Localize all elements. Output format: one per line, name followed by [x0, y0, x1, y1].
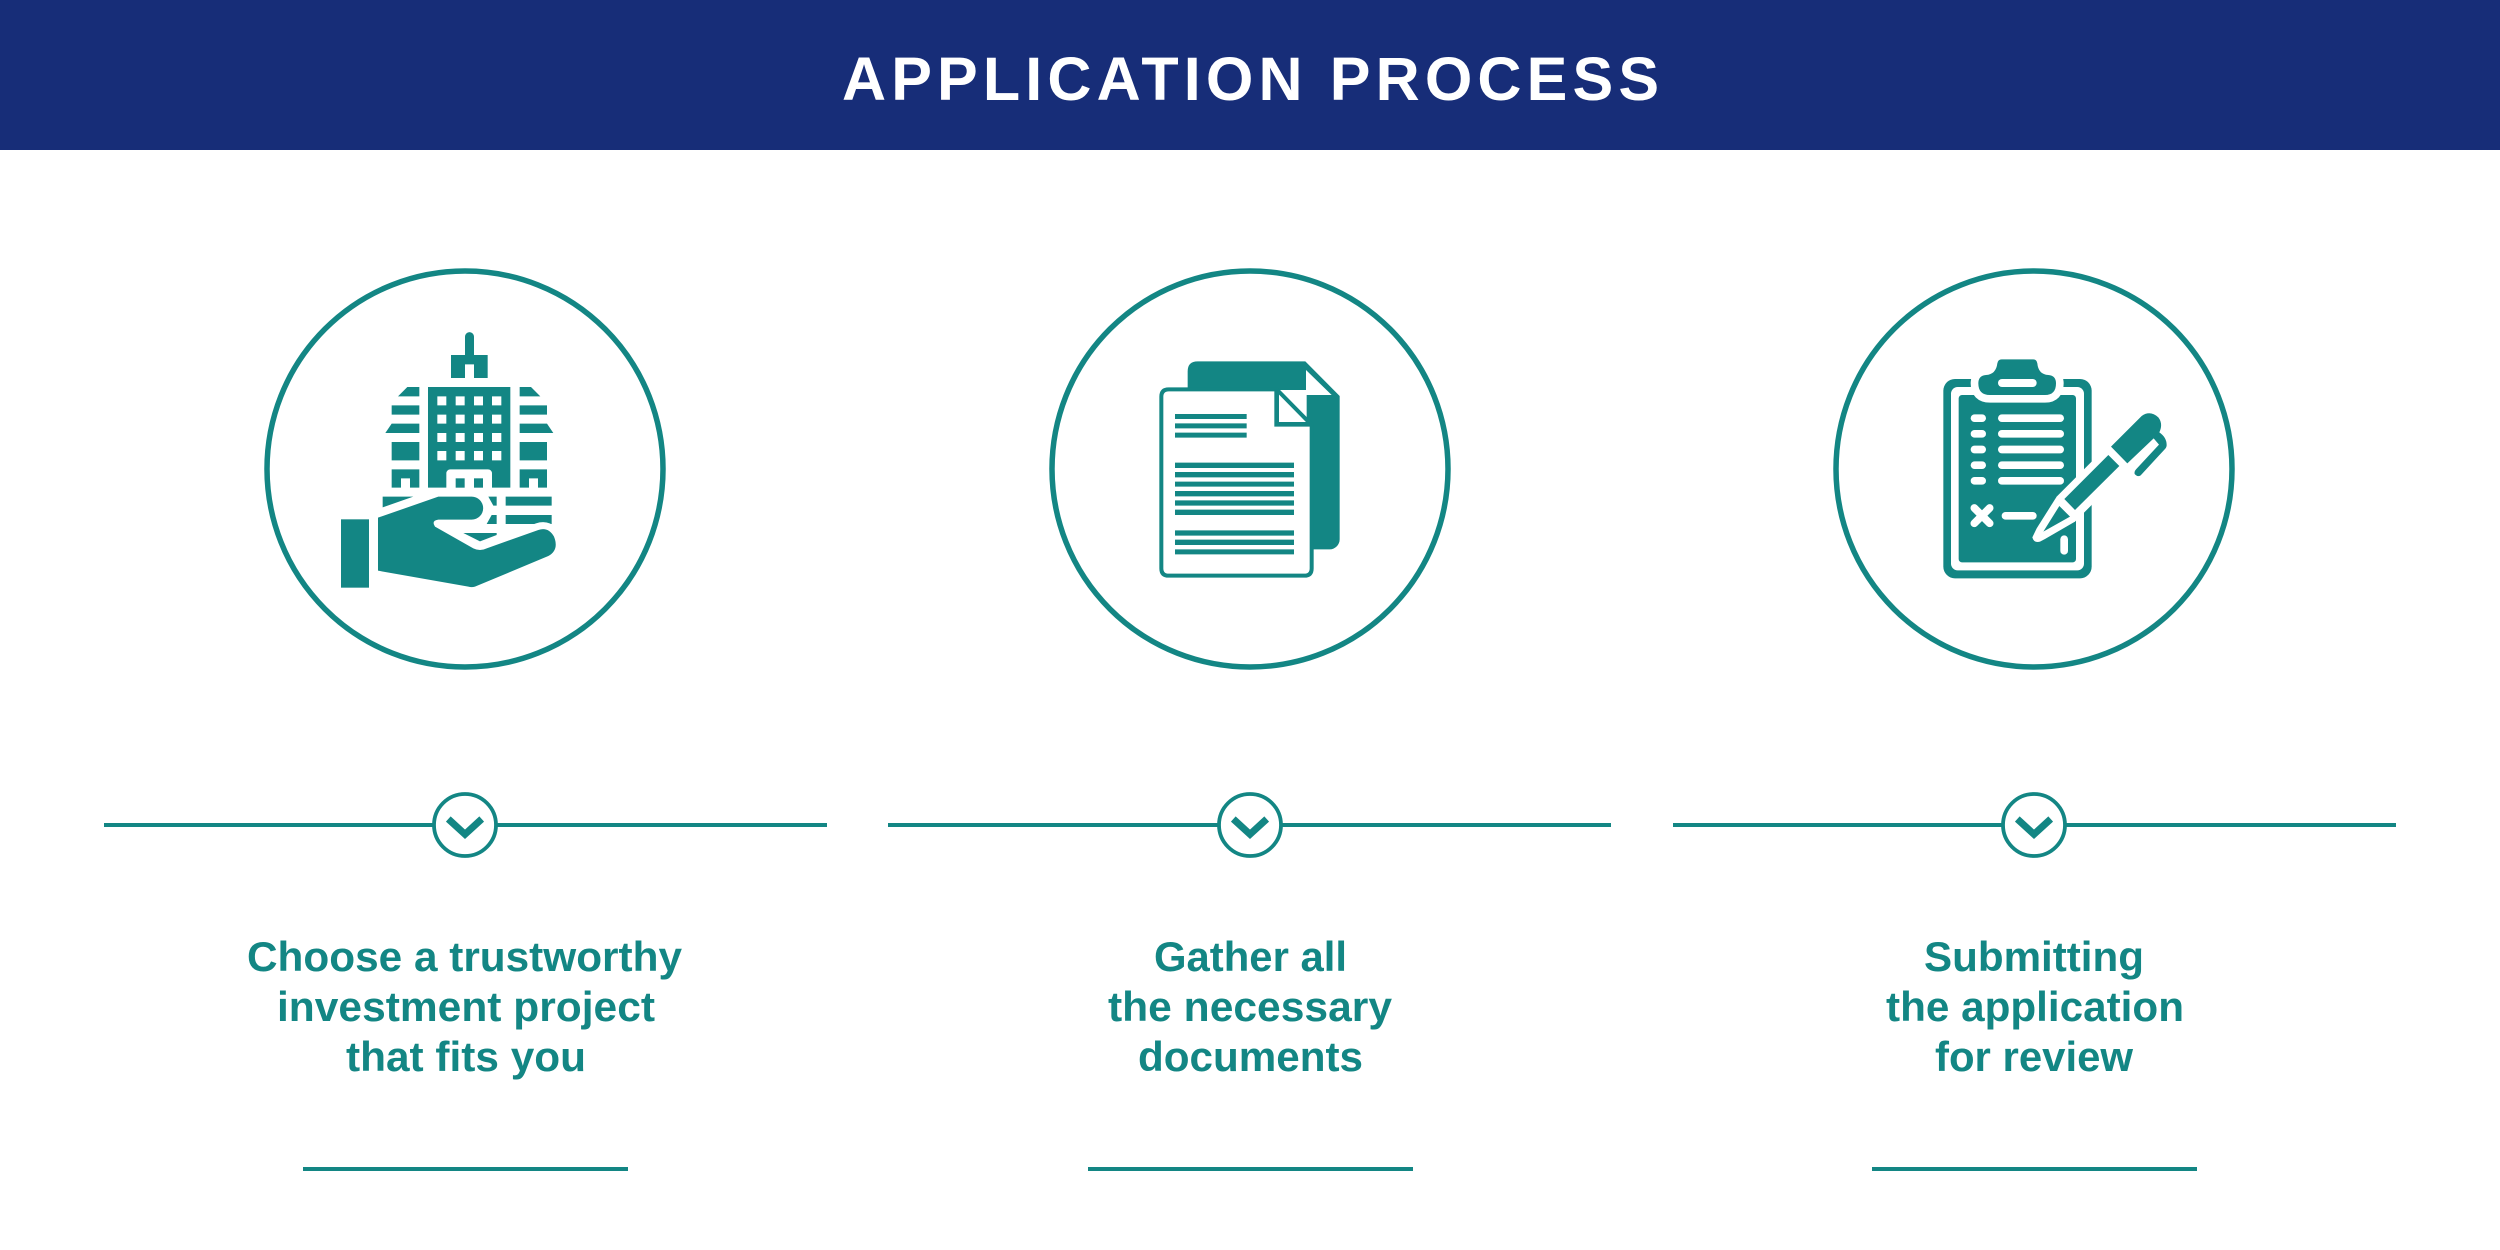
icon: building on hand — [341, 332, 556, 588]
divider with chevron badge: step 2 — [888, 794, 1611, 856]
divider with chevron badge: step 3 — [1673, 794, 2396, 856]
step 2 label — [1108, 933, 1393, 1080]
step 1 label: Choose a trustworthy — [247, 933, 683, 980]
panel: step 1 — [104, 271, 827, 1171]
bottom rule: step 3 — [1872, 1167, 2197, 1171]
step 3 label — [1886, 933, 2184, 1080]
step 2 label: the necessary — [1108, 983, 1393, 1030]
step 2 label: documents — [1138, 1033, 1363, 1080]
step 1 label: that fits you — [346, 1033, 586, 1080]
icon: clipboard and pen — [1943, 359, 2167, 578]
step 3 label: Submitting — [1924, 933, 2144, 980]
title: APPLICATION PROCESS — [842, 45, 1659, 113]
bottom rule: step 1 — [303, 1167, 628, 1171]
bottom rule: step 2 — [1088, 1167, 1413, 1171]
step 3 label: for review — [1935, 1033, 2133, 1080]
icon: documents — [1161, 361, 1340, 576]
icon ring: step 1 — [267, 271, 663, 667]
header banner — [0, 0, 2500, 150]
step 2 label: Gather all — [1154, 933, 1347, 980]
step 1 label: investment project — [277, 983, 655, 1030]
step 1 label — [247, 933, 683, 1080]
panel: step 2 — [888, 271, 1611, 1171]
icon ring: step 3 — [1836, 271, 2232, 667]
icon ring: step 2 — [1052, 271, 1448, 667]
step 3 label: the application — [1886, 983, 2184, 1030]
divider with chevron badge: step 1 — [104, 794, 827, 856]
panel: step 3 — [1673, 271, 2396, 1171]
